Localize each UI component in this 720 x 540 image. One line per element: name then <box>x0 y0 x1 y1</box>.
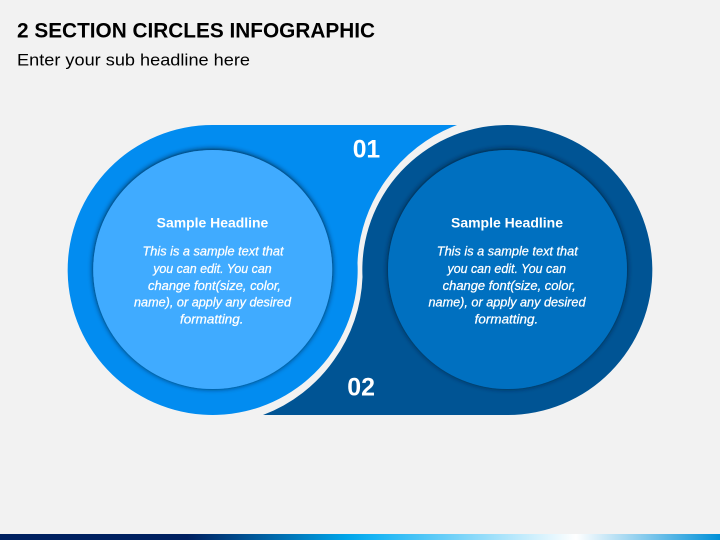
section 01 body text: formatting. <box>180 312 244 326</box>
section 01 body text <box>134 245 292 326</box>
title: 2 SECTION CIRCLES INFOGRAPHIC <box>17 18 375 42</box>
section 02 body text: you can edit. You can <box>447 262 566 276</box>
section 01 number: 01 <box>353 135 380 163</box>
section 02 body text: This is a sample text that <box>437 245 578 259</box>
section 01 body text: This is a sample text that <box>142 245 284 259</box>
section 02 headline: Sample Headline <box>451 216 564 231</box>
section 02 body text: name), or apply any desired <box>428 296 587 310</box>
section 01 body text: name), or apply any desired <box>134 296 292 310</box>
subtitle: Enter your sub headline here <box>17 50 250 70</box>
section 01 headline: Sample Headline <box>157 216 269 231</box>
section 01 outer shape <box>68 125 457 415</box>
panel: section 01 <box>68 125 457 415</box>
section 02 number: 02 <box>347 374 375 402</box>
section 02 body text: formatting. <box>475 312 538 326</box>
bottom gradient bar <box>0 534 720 540</box>
section 01 body text: you can edit. You can <box>152 262 272 276</box>
section 01 inner circle <box>93 150 332 389</box>
panel: section 02 <box>263 125 652 415</box>
section 01 body text: change font(size, color, <box>148 279 281 293</box>
section 02 body text: change font(size, color, <box>443 279 576 293</box>
section 02 inner circle <box>388 150 627 389</box>
section 02 outer shape <box>263 125 652 415</box>
section 02 body text <box>428 245 587 326</box>
